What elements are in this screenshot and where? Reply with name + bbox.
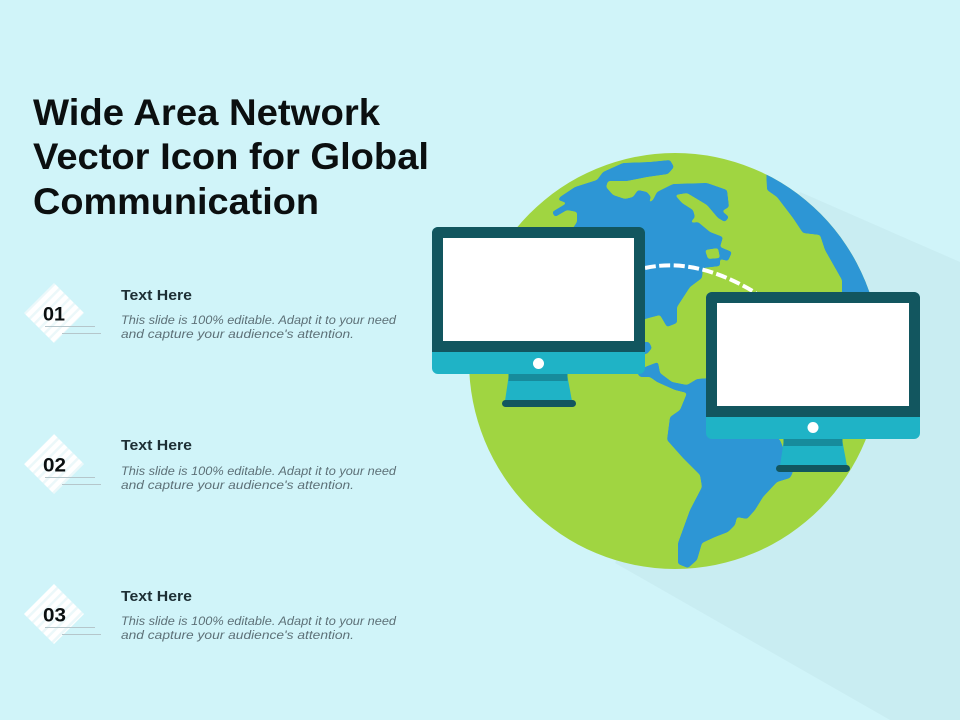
north america landmass — [552, 160, 732, 330]
stand — [505, 374, 572, 401]
description 03 — [121, 616, 397, 642]
south america landmass — [637, 362, 793, 568]
monitor left — [432, 227, 645, 407]
heading 03: Text Here — [121, 588, 192, 605]
number 02: 02 — [43, 456, 66, 476]
diamond badge 03 — [24, 584, 84, 644]
description 01: This slide is 100% editable. Adapt it to your need — [121, 315, 397, 327]
item 01 — [24, 283, 397, 343]
body — [706, 292, 920, 439]
long shadow of globe — [615, 192, 960, 720]
title: Communication — [33, 181, 319, 222]
description 02: and capture your audience's attention. — [121, 480, 354, 492]
monitor right — [706, 292, 920, 472]
description 03: and capture your audience's attention. — [121, 630, 354, 642]
title: Vector Icon for Global — [33, 136, 429, 177]
stand — [780, 439, 847, 466]
title: Wide Area Network — [33, 92, 380, 133]
description 01 — [121, 315, 397, 341]
number 01: 01 — [43, 304, 65, 326]
foot — [776, 465, 850, 472]
heading 02: Text Here — [121, 437, 192, 454]
heading 01: Text Here — [121, 287, 192, 304]
item 03 — [24, 584, 397, 644]
description 02: This slide is 100% editable. Adapt it to your need — [121, 466, 397, 478]
globe — [469, 150, 900, 569]
foot — [502, 400, 576, 407]
screen — [443, 238, 634, 341]
description 02 — [121, 466, 397, 492]
small caribbean island — [645, 342, 652, 354]
eastern landmass — [766, 150, 900, 300]
power dot — [808, 422, 818, 433]
diamond badge 02 — [24, 434, 84, 494]
power dot — [533, 358, 544, 369]
body — [432, 227, 645, 374]
description 03: This slide is 100% editable. Adapt it to your need — [121, 616, 397, 628]
title — [33, 92, 429, 222]
item 02 — [24, 434, 397, 494]
landmasses — [552, 160, 870, 568]
dashed connection arc — [645, 265, 756, 293]
number 03: 03 — [43, 606, 66, 626]
diamond badge 01 — [24, 283, 84, 343]
screen — [717, 303, 909, 406]
description 01: and capture your audience's attention. — [121, 329, 354, 341]
